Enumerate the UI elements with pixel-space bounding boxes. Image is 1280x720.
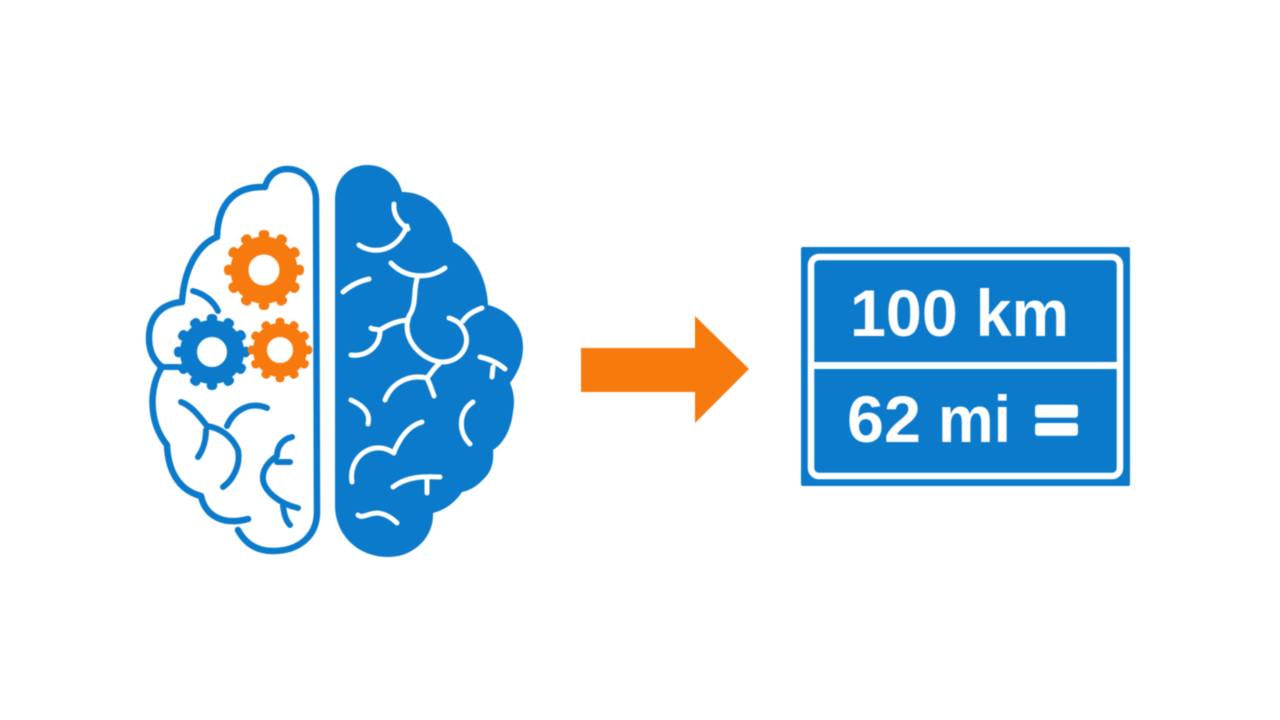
sign border (811, 257, 1120, 476)
icon: large orange gear (228, 234, 300, 306)
right brain folds (343, 204, 505, 523)
left brain hemisphere outline (149, 169, 317, 551)
icon: small orange gear (252, 322, 308, 378)
arrow (581, 316, 749, 423)
sign background (801, 247, 1130, 486)
icon: brain with gears (149, 165, 523, 557)
text: 62 mi =: = (1035, 382, 1078, 458)
icon: blue gear (178, 318, 246, 386)
text: 62 mi =: 62 (847, 382, 921, 456)
text: 100 km: 100 km (850, 276, 1069, 350)
text: 62 mi = (847, 382, 1078, 458)
text: 62 mi =: mi (938, 382, 1011, 456)
road sign (801, 247, 1130, 486)
sign divider (811, 362, 1120, 369)
right brain hemisphere filled (335, 165, 523, 557)
